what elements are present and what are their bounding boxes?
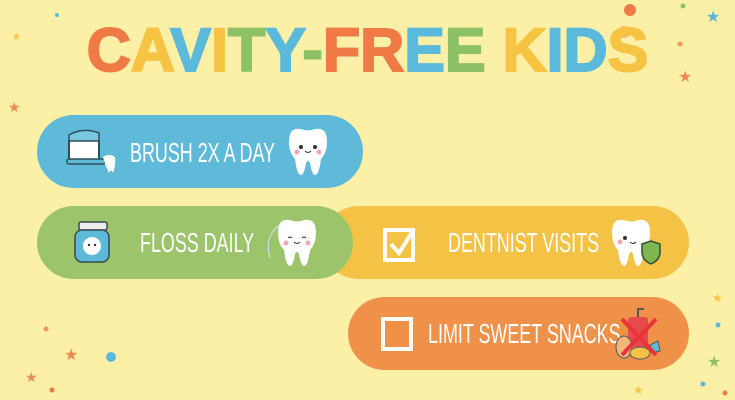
decorative dots and stars: ★ <box>707 354 721 371</box>
panel: floss <box>37 206 353 279</box>
text: BRUSH 2X A DAY <box>130 137 275 168</box>
icon: toothpaste <box>66 130 116 173</box>
panel: brush <box>37 115 363 188</box>
decorative dots and stars: ★ <box>12 32 21 43</box>
icon: floss box <box>74 221 110 263</box>
icon: tooth with shield <box>612 220 661 266</box>
panel: limit sweets <box>348 297 689 370</box>
icon: no sweets <box>616 308 661 360</box>
icon: checkbox <box>383 228 416 262</box>
decorative dots and stars: ★ <box>678 69 692 86</box>
title: CAVITY-FREE KIDS <box>87 16 648 84</box>
decorative dots and stars: ★ <box>8 99 21 115</box>
icon: tooth with floss <box>268 220 316 266</box>
text: FLOSS DAILY <box>140 227 254 258</box>
decorative dots and stars: ★ <box>633 383 644 397</box>
decorative dots and stars: ★ <box>706 9 720 26</box>
decorative dots and stars: ★ <box>64 347 78 364</box>
icon: tooth <box>289 128 327 175</box>
panel: dentist visits <box>322 206 689 279</box>
icon: empty checkbox <box>381 317 413 351</box>
decorative dots and stars: ★ <box>712 291 723 305</box>
text: LIMIT SWEET SNACKS <box>428 318 621 349</box>
decorative dots and stars: ★ <box>25 369 38 385</box>
text: DENTNIST VISITS <box>448 227 599 258</box>
